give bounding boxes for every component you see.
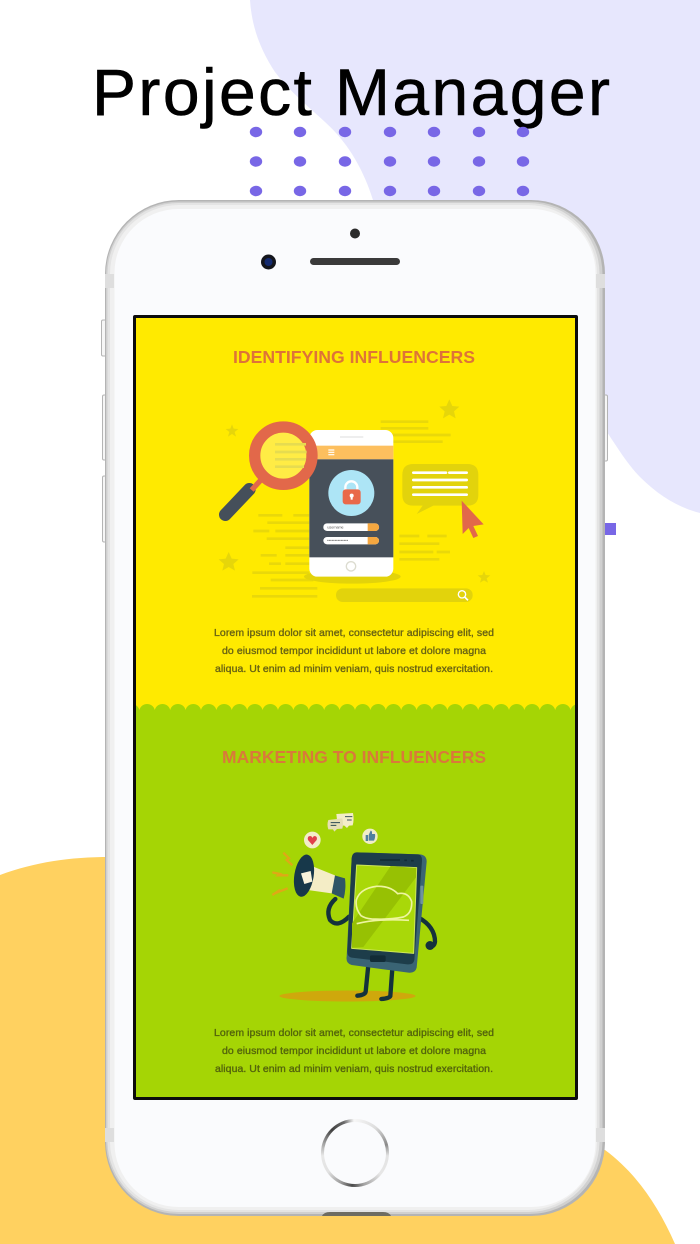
title: Project Manager: [92, 55, 610, 129]
lock icon: [328, 470, 374, 516]
background text lines: [252, 422, 451, 596]
panel: identifying influencers: [136, 318, 575, 713]
earpiece speaker: [310, 258, 400, 265]
chat bubbles: [327, 813, 354, 832]
cursor arrow: [462, 501, 484, 538]
body text: Lorem ipsum dolor sit amet, consectetur adipiscing elit, sed: [214, 627, 494, 639]
front camera: [261, 254, 276, 270]
sound sparks: [272, 853, 292, 895]
body text: [214, 1027, 494, 1075]
background blob: yellow orange: [0, 857, 675, 1244]
side buttons: [102, 320, 608, 542]
illustration: phone with megaphone: [272, 813, 435, 1002]
search bar: [336, 588, 473, 602]
heading: IDENTIFYING INFLUENCERS: [233, 347, 475, 367]
background blob: lavender: [250, 0, 700, 513]
body text: do eiusmod tempor incididunt ut labore et dolore magna: [222, 645, 486, 657]
panel: marketing to influencers: [124, 704, 586, 1097]
antenna ticks: [105, 274, 605, 1142]
body text: aliqua. Ut enim ad minim veniam, quis nostrud exercitation.: [215, 663, 493, 675]
screen frame: [133, 315, 578, 1100]
purple square: [605, 523, 616, 535]
body text: do eiusmod tempor incididunt ut labore et dolore magna: [222, 1045, 486, 1057]
magnifying glass: [225, 427, 312, 515]
front sensor: [350, 228, 360, 238]
body text: Lorem ipsum dolor sit amet, consectetur adipiscing elit, sed: [214, 1027, 494, 1039]
speech bubble: [402, 464, 478, 514]
heading: MARKETING TO INFLUENCERS: [222, 747, 486, 767]
illustration: phone login with magnifier: [219, 399, 490, 602]
ground shadow: [280, 990, 416, 1002]
mini phone: [309, 430, 393, 577]
phone mockup: [102, 200, 608, 1216]
body text: aliqua. Ut enim ad minim veniam, quis nostrud exercitation.: [215, 1063, 493, 1075]
cartoon phone: [347, 852, 427, 973]
phone shadow: [304, 572, 401, 584]
stars: [219, 399, 490, 583]
megaphone and reaction icons: [272, 813, 378, 899]
bottom connector: [322, 1212, 391, 1216]
heart reaction: [304, 832, 321, 848]
body text: [214, 627, 494, 675]
phone legs and arms: [328, 899, 435, 999]
screen content: [124, 318, 586, 1097]
megaphone: [332, 875, 345, 899]
dot grid: [250, 127, 529, 196]
home button: [321, 1118, 389, 1186]
login fields: [323, 523, 379, 544]
login fields: username: [327, 526, 344, 530]
right hand: [426, 941, 434, 950]
thumbs up reaction: [362, 829, 378, 844]
phone body: [105, 200, 605, 1216]
